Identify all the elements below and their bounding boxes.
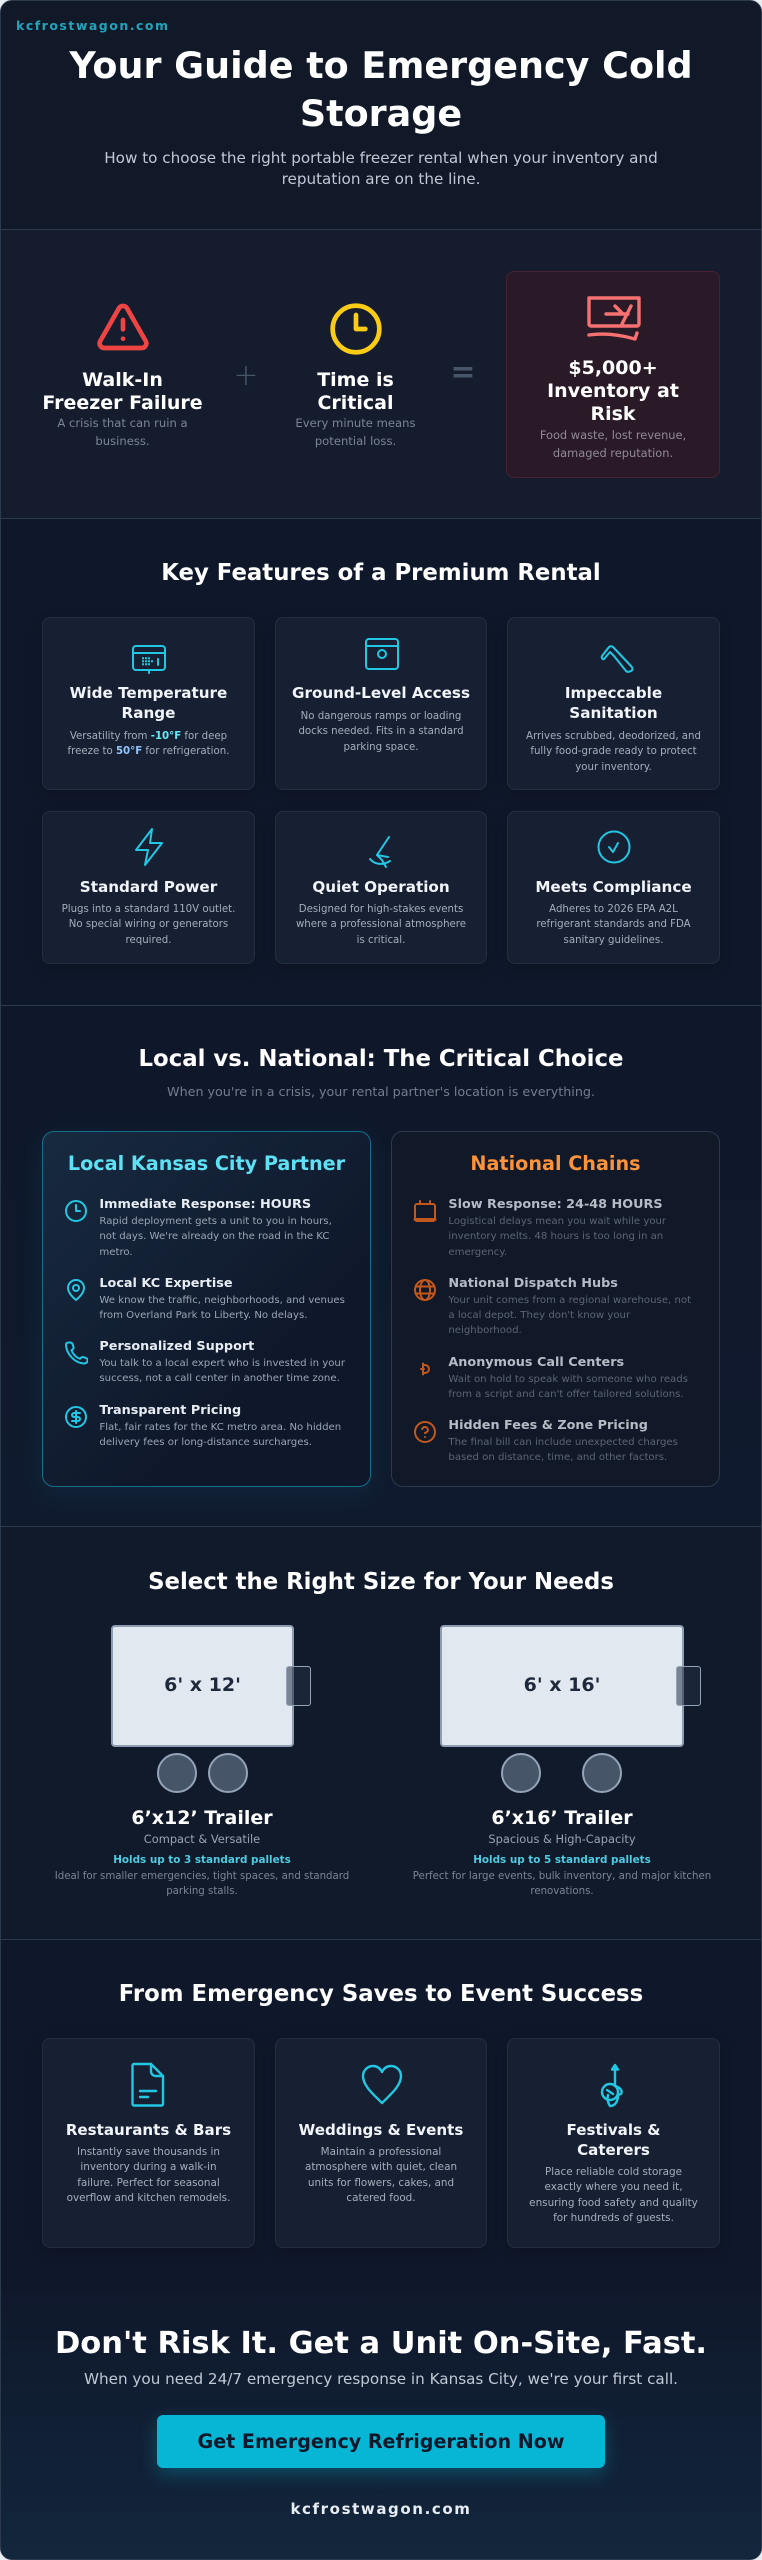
panel title: Local Kansas City Partner <box>68 1152 345 1175</box>
heading <box>317 369 394 414</box>
card title: Quiet Operation <box>312 878 450 896</box>
item: hidden fees: The final bill can include unexpected charges <box>448 1437 678 1448</box>
icon: lightning bolt <box>135 828 163 866</box>
card title: Festivals & <box>567 2121 660 2139</box>
item: slow response: Slow Response: 24-48 HOURS <box>448 1197 663 1212</box>
title: Storage <box>300 92 462 135</box>
card text: required. <box>126 935 171 946</box>
card text: catered food. <box>346 2192 416 2204</box>
card text: freeze to 50°F for refrigeration. <box>68 746 229 757</box>
subtitle: reputation are on the line. <box>282 170 480 188</box>
card text: Place reliable cold storage <box>545 2166 682 2178</box>
card text: Versatility from -10°F for deep <box>70 731 227 742</box>
icon: warning triangle <box>97 304 149 350</box>
subheading: When you're in a crisis, your rental partner's location is everything. <box>167 1084 595 1099</box>
diagram: 6x12 trailer <box>110 1625 312 1793</box>
icon: map pin <box>67 1279 85 1301</box>
text: 6x12 trailer details: Compact & Versatile <box>144 1832 260 1846</box>
diagram: 6x16 trailer: 6' x 16' <box>524 1674 600 1696</box>
description: potential loss. <box>315 434 396 448</box>
description: business. <box>95 434 150 448</box>
card text: units for flowers, cakes, and <box>308 2177 454 2189</box>
card: compliance <box>507 811 720 964</box>
item: personalized support: success, not a call center in another time zone. <box>99 1373 340 1384</box>
text: 6x16 trailer details: renovations. <box>530 1886 594 1897</box>
card text <box>526 731 701 773</box>
card text: failure. Perfect for seasonal <box>77 2177 220 2189</box>
button <box>157 2415 605 2468</box>
heading: $5,000+ <box>568 357 658 379</box>
icon: quiet sprig <box>369 836 391 868</box>
item: dispatch hubs <box>414 1276 691 1336</box>
card text <box>536 904 691 946</box>
item: call centers: Anonymous Call Centers <box>448 1354 624 1370</box>
panel title: National Chains <box>470 1152 641 1175</box>
item: transparent pricing <box>65 1403 341 1448</box>
plus sign: + <box>233 358 259 393</box>
card text: fully food-grade ready to protect <box>530 746 697 757</box>
card text: Plugs into a standard 110V outlet. <box>62 904 235 915</box>
card text: overflow and kitchen remodels. <box>67 2192 230 2204</box>
item: local expertise <box>67 1276 345 1321</box>
card text: sanitary guidelines. <box>564 935 663 946</box>
icon: clock <box>65 1200 87 1222</box>
card text: No dangerous ramps or loading <box>301 711 461 722</box>
card text: docks needed. Fits in a standard <box>298 726 464 737</box>
card text: Adheres to 2026 EPA A2L <box>549 904 678 915</box>
item: dispatch hubs: a local depot. They don't know your <box>448 1310 630 1321</box>
card text: Instantly save thousands in <box>77 2146 220 2158</box>
item: immediate response <box>65 1197 332 1258</box>
card title: Sanitation <box>569 704 658 722</box>
item: slow response: emergency. <box>448 1247 507 1258</box>
description: Food waste, lost revenue, <box>540 428 686 442</box>
icon: thermostat panel <box>132 645 166 674</box>
item: local expertise: We know the traffic, neighborhoods, and venues <box>99 1295 345 1306</box>
icon: calendar <box>414 1200 436 1222</box>
title: Your Guide to Emergency Cold <box>69 44 693 87</box>
equals sign: = <box>450 355 476 390</box>
icon: scrub brush <box>600 645 634 673</box>
panel: local partner <box>42 1131 371 1487</box>
subtitle: How to choose the right portable freezer rental when your inventory and <box>104 149 658 167</box>
heading: From Emergency Saves to Event Success <box>119 1981 643 2007</box>
card title: Meets Compliance <box>535 878 692 896</box>
item: personalized support: Personalized Support <box>99 1339 254 1354</box>
card title: Ground-Level Access <box>292 684 470 702</box>
heading: Select the Right Size for Your Needs <box>148 1569 614 1595</box>
icon: document <box>129 2062 167 2108</box>
card text <box>296 904 466 946</box>
panel: national chains <box>391 1131 720 1487</box>
item: transparent pricing: delivery fees or long-distance surcharges. <box>99 1437 312 1448</box>
icon: dollar <box>65 1406 87 1428</box>
card text <box>508 2165 719 2226</box>
card text: Designed for high-stakes events <box>299 904 463 915</box>
heading: Walk-In <box>82 369 163 391</box>
card text: No special wiring or generators <box>69 919 228 930</box>
item: transparent pricing: Flat, fair rates for the KC metro area. No hidden <box>99 1422 341 1433</box>
item: call centers: Wait on hold to speak with someone who reads <box>448 1374 688 1384</box>
item: call centers: from a script and can't offer tailored solutions. <box>448 1389 684 1400</box>
card title: Weddings & Events <box>299 2121 463 2139</box>
card: sanitation <box>507 617 720 790</box>
item: local expertise: Local KC Expertise <box>99 1276 233 1291</box>
equation term: time <box>295 303 416 448</box>
diagram: 6x16 trailer <box>439 1625 702 1793</box>
text: 6x12 trailer details: Ideal for smaller emergencies, tight spaces, and standard <box>55 1870 349 1882</box>
icon: check circle <box>598 830 630 864</box>
card text <box>68 731 229 757</box>
card title: Wide Temperature <box>70 684 227 702</box>
description: Every minute means <box>295 416 416 430</box>
card text: atmosphere with quiet, clean <box>305 2161 457 2173</box>
card text: for hundreds of guests. <box>553 2212 674 2224</box>
brand label: kcfrostwagon.com <box>16 18 170 33</box>
call to action heading: Don't Risk It. Get a Unit On-Site, Fast. <box>55 2326 707 2361</box>
card title <box>70 684 227 722</box>
card: temperature <box>42 617 255 790</box>
item: immediate response: Rapid deployment gets a unit to you in hours, <box>99 1216 332 1227</box>
text: 6x16 trailer details: Spacious & High-Capacity <box>488 1832 636 1846</box>
card text <box>43 2145 254 2206</box>
card: power <box>42 811 255 964</box>
item: slow response <box>414 1197 666 1258</box>
item: personalized support <box>65 1339 346 1384</box>
card: festivals <box>507 2038 720 2248</box>
card text <box>62 904 235 946</box>
card text: parking space. <box>344 742 418 753</box>
item: transparent pricing: Transparent Pricing <box>99 1403 241 1418</box>
item: dispatch hubs: Your unit comes from a regional warehouse, not <box>448 1295 691 1306</box>
description: A crisis that can ruin a <box>57 416 188 430</box>
heading: Key Features of a Premium Rental <box>161 560 601 586</box>
subtitle <box>104 149 658 188</box>
card text: inventory during a walk-in <box>80 2161 217 2173</box>
equation term: walk-in failure <box>42 304 203 448</box>
item: slow response: inventory melts. 48 hours is too long in an <box>448 1231 663 1242</box>
item: call centers <box>420 1354 688 1400</box>
section: local vs national <box>0 1007 762 1527</box>
card: quiet <box>275 811 487 964</box>
diagram: 6x12 trailer: 6' x 12' <box>164 1674 241 1696</box>
heading <box>42 369 203 414</box>
card: access <box>275 617 487 790</box>
icon: door <box>365 638 399 670</box>
item: immediate response: not days. We're already on the road in the KC <box>99 1231 329 1242</box>
call to action text: When you need 24/7 emergency response in Kansas City, we're your first call. <box>84 2370 678 2388</box>
text: 6x12 trailer details: parking stalls. <box>166 1886 238 1897</box>
card text: refrigerant standards and FDA <box>536 919 691 930</box>
description <box>540 428 686 460</box>
section: header <box>0 1 762 230</box>
heading: Time is <box>317 369 394 391</box>
card text: is critical. <box>357 935 405 946</box>
item: immediate response: Immediate Response: HOURS <box>99 1197 311 1212</box>
card title: Caterers <box>577 2141 650 2159</box>
card text: Arrives scrubbed, deodorized, and <box>526 731 701 742</box>
item: hidden fees <box>413 1418 713 1465</box>
text: 6x16 trailer details: Holds up to 5 standard pallets <box>473 1854 651 1866</box>
section: features <box>0 519 762 1006</box>
text: 6x16 trailer details: 6’x16’ Trailer <box>491 1807 633 1829</box>
heading: Local vs. National: The Critical Choice <box>139 1046 623 1072</box>
section: equation <box>0 230 762 519</box>
section: uses and call to action <box>0 1941 762 2560</box>
card: restaurants <box>42 2038 255 2248</box>
card title: Restaurants & Bars <box>66 2121 231 2139</box>
card text: your inventory. <box>575 762 652 773</box>
heading: Freezer Failure <box>42 392 203 414</box>
icon: question <box>413 1420 437 1444</box>
item: immediate response: metro. <box>99 1247 133 1258</box>
icon: globe <box>414 1279 436 1301</box>
card title: Range <box>122 704 175 722</box>
card title <box>565 684 662 722</box>
title <box>69 44 693 135</box>
item: dispatch hubs: neighborhood. <box>448 1325 522 1336</box>
heading: Critical <box>317 392 394 414</box>
text: 6x12 trailer details: Holds up to 3 standard pallets <box>113 1854 291 1866</box>
description <box>57 416 188 448</box>
text: 6x12 trailer details: 6’x12’ Trailer <box>131 1807 273 1829</box>
footer url: kcfrostwagon.com <box>290 2500 472 2518</box>
heading: Risk <box>590 403 636 425</box>
description: damaged reputation. <box>553 446 673 460</box>
icon: clock <box>330 303 382 355</box>
heading: Inventory at <box>547 380 679 402</box>
card text: Maintain a professional <box>321 2146 441 2158</box>
item: personalized support: You talk to a local expert who is invested in your <box>99 1358 345 1369</box>
text: 6x16 trailer details: Perfect for large events, bulk inventory, and major kitchen <box>413 1870 711 1882</box>
icon: small coin <box>413 1356 437 1380</box>
card title: Impeccable <box>565 684 662 702</box>
icon: festival knot <box>598 2063 630 2111</box>
icon: lost money <box>587 296 641 341</box>
card title: Standard Power <box>80 878 217 896</box>
panel: inventory at risk <box>506 271 720 478</box>
card: weddings <box>275 2038 487 2248</box>
section: trailer sizes background <box>0 1527 762 1940</box>
text: 6x16 trailer details <box>381 1806 743 1902</box>
item: slow response: Logistical delays mean you wait while your <box>448 1216 666 1227</box>
item: local expertise: from Overland Park to Liberty. No delays. <box>99 1310 307 1321</box>
icon: phone <box>65 1342 88 1364</box>
item: dispatch hubs: National Dispatch Hubs <box>448 1276 618 1291</box>
card text <box>276 2145 486 2206</box>
description <box>295 416 416 448</box>
item: hidden fees: Hidden Fees & Zone Pricing <box>448 1418 648 1433</box>
heading <box>547 357 679 425</box>
card text: where a professional atmosphere <box>296 919 466 930</box>
icon: heart <box>360 2064 404 2106</box>
card text: ensuring food safety and quality <box>529 2197 698 2209</box>
card text <box>298 711 464 753</box>
card text: exactly where you need it, <box>544 2181 682 2193</box>
text: 6x12 trailer details <box>21 1806 383 1902</box>
item: hidden fees: based on distance, time, and other factors. <box>448 1452 667 1463</box>
card title <box>508 2120 719 2161</box>
button: Get Emergency Refrigeration Now <box>198 2430 564 2453</box>
